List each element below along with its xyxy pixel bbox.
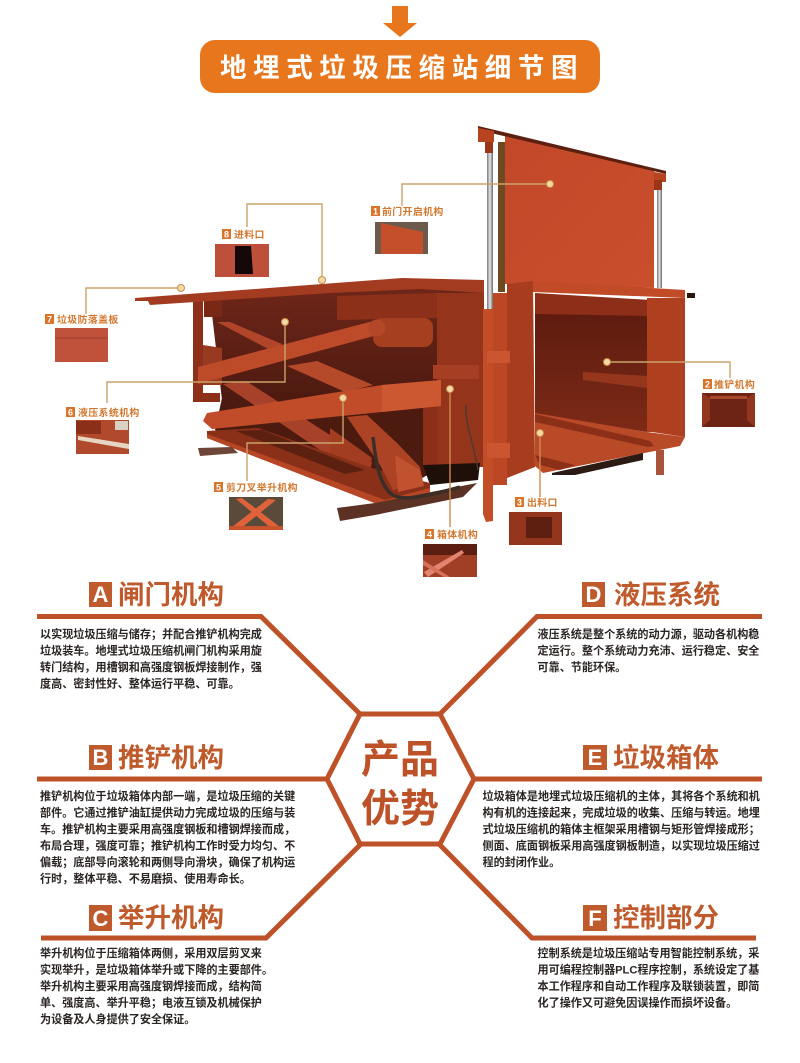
connector E	[474, 776, 762, 782]
title banner: 地埋式垃圾压缩站细节图	[220, 53, 584, 83]
section B text: 偏载；底部导向滚轮和两侧导向滑块，确保了机构运	[40, 855, 295, 869]
machine: lift column and front cylinder	[483, 293, 510, 522]
machine: front scissor body	[193, 285, 484, 521]
section C text: 举升机构主要采用高强度钢焊接而成，结构简	[40, 979, 262, 993]
callout 8: feed inlet: 8	[224, 230, 229, 240]
section E text: 式垃圾压缩机的箱体主框架采用槽钢与矩形管焊接成形；	[482, 822, 760, 836]
section A text: 转门结构，用槽钢和高强度钢板焊接制作，强	[40, 660, 262, 674]
section B text: 布局合理，强度可靠；推铲机构工作时受力均匀、不	[40, 838, 295, 852]
section D text: 定运行。整个系统动力充沛、运行稳定、安全	[538, 644, 759, 658]
callout 7: anti-drop cover plate: 7	[47, 314, 52, 324]
hexagon label: 优势	[361, 788, 439, 831]
section D heading: D	[586, 582, 601, 607]
section B text	[40, 789, 295, 886]
section B text: 行时，整体平稳、不易磨损、使用寿命长。	[40, 872, 251, 886]
callout 2: push plate mechanism	[604, 358, 755, 427]
connector F	[439, 844, 756, 938]
callout 1: front door mechanism	[371, 180, 554, 254]
callout 3: discharge port	[509, 430, 562, 545]
callout 8: feed inlet	[215, 204, 326, 284]
callout 3: discharge port: 出料口	[527, 496, 558, 509]
callout 5: scissor lift	[214, 394, 346, 530]
section E text: 构有机的连接起来，完成垃圾的收集、压缩与转运。地埋	[482, 806, 760, 820]
section A text: 垃圾装车。地埋式垃圾压缩机闸门机构采用旋	[40, 644, 262, 658]
connector B	[37, 776, 327, 782]
section B heading: 推铲机构	[118, 743, 224, 773]
section E heading: E	[588, 745, 602, 770]
callout 4: box body: 箱体机构	[437, 528, 478, 541]
hexagon centre with connector lines	[37, 616, 762, 938]
section F text: 用可编程控制器PLC程序控制，系统设定了基	[538, 962, 759, 976]
connector C	[41, 844, 361, 938]
callout 6: hydraulic system: 液压系统机构	[78, 406, 140, 419]
callout 3: discharge port: 3	[517, 498, 522, 508]
section D text	[538, 627, 759, 674]
section B text: 车。推铲机构主要采用高强度钢板和槽钢焊接而成，	[40, 822, 295, 836]
hexagon label: 产品	[361, 739, 439, 782]
hexagon label	[361, 739, 439, 831]
machine illustration	[135, 126, 695, 522]
connector A	[37, 616, 360, 714]
title banner	[200, 40, 600, 93]
section F text: 控制系统是垃圾压缩站专用智能控制系统，采	[538, 946, 759, 960]
connector D	[440, 616, 762, 714]
section A heading: A	[93, 582, 109, 607]
callout 7: anti-drop cover plate	[45, 284, 184, 362]
section A text: 以实现垃圾压缩与储存；并配合推铲机构完成	[40, 627, 262, 641]
callout 5: scissor lift: 剪刀叉举升机构	[226, 481, 298, 494]
section F text: 本工作程序和自动工作程序及联锁装置，即简	[538, 979, 759, 993]
section F heading: F	[588, 906, 602, 931]
section C text: 为设备及人身提供了安全保证。	[40, 1012, 195, 1026]
section E text: 侧面、底面钢板采用高强度钢板制造，以实现垃圾压缩过	[482, 838, 760, 852]
section C heading: 举升机构	[118, 903, 224, 933]
callout 7: anti-drop cover plate: 垃圾防落盖板	[57, 313, 119, 326]
callout 1: front door mechanism: 1	[373, 206, 378, 216]
callout 2: push plate mechanism: 2	[705, 380, 710, 390]
section F text	[538, 946, 759, 1010]
section C text: 实现举升，是垃圾箱体举升或下降的主要部件。	[40, 962, 273, 976]
section B text: 推铲机构位于垃圾箱体内部一端，是垃圾压缩的关键	[40, 789, 295, 803]
callout 4: box body: 4	[427, 530, 432, 540]
callout 6: hydraulic system: 6	[68, 408, 73, 418]
section F text: 化了操作又可避免因误操作而损坏设备。	[538, 996, 737, 1010]
section D text: 可靠、节能环保。	[538, 660, 626, 674]
section E heading: 垃圾箱体	[613, 743, 719, 773]
section A heading: 闸门机构	[118, 580, 224, 610]
section D text: 液压系统是整个系统的动力源，驱动各机构稳	[538, 627, 759, 641]
section E text	[482, 789, 760, 869]
machine: open compressor box	[507, 281, 695, 478]
section C text	[40, 946, 273, 1026]
section E text: 垃圾箱体是地埋式垃圾压缩机的主体，其将各个系统和机	[482, 789, 760, 803]
arrow: down arrow above title	[383, 6, 417, 37]
section C heading: C	[93, 906, 109, 931]
section A text: 度高、密封性好、整体运行平稳、可靠。	[40, 676, 240, 690]
callout 4: box body	[423, 386, 478, 577]
callout 6: hydraulic system	[66, 318, 288, 454]
callout 2: push plate mechanism: 推铲机构	[714, 378, 755, 391]
section D heading: 液压系统	[614, 580, 720, 610]
section C text: 举升机构位于压缩箱体两侧，采用双层剪叉来	[40, 946, 262, 960]
callout 1: front door mechanism: 前门开启机构	[382, 205, 444, 218]
section F heading: 控制部分	[613, 903, 719, 933]
section A text	[40, 627, 262, 690]
section B heading: B	[93, 745, 108, 770]
machine: rear door panel	[478, 126, 666, 309]
callout 5: scissor lift: 5	[216, 482, 221, 492]
section B text: 部件。它通过推铲油缸提供动力完成垃圾的压缩与装	[40, 806, 295, 820]
section C text: 单、强度高、举升平稳；电液互锁及机械保护	[40, 996, 262, 1010]
callout 8: feed inlet: 进料口	[234, 228, 265, 241]
section E text: 程的封闭作业。	[482, 855, 560, 869]
machine: top deck plate	[135, 278, 484, 305]
